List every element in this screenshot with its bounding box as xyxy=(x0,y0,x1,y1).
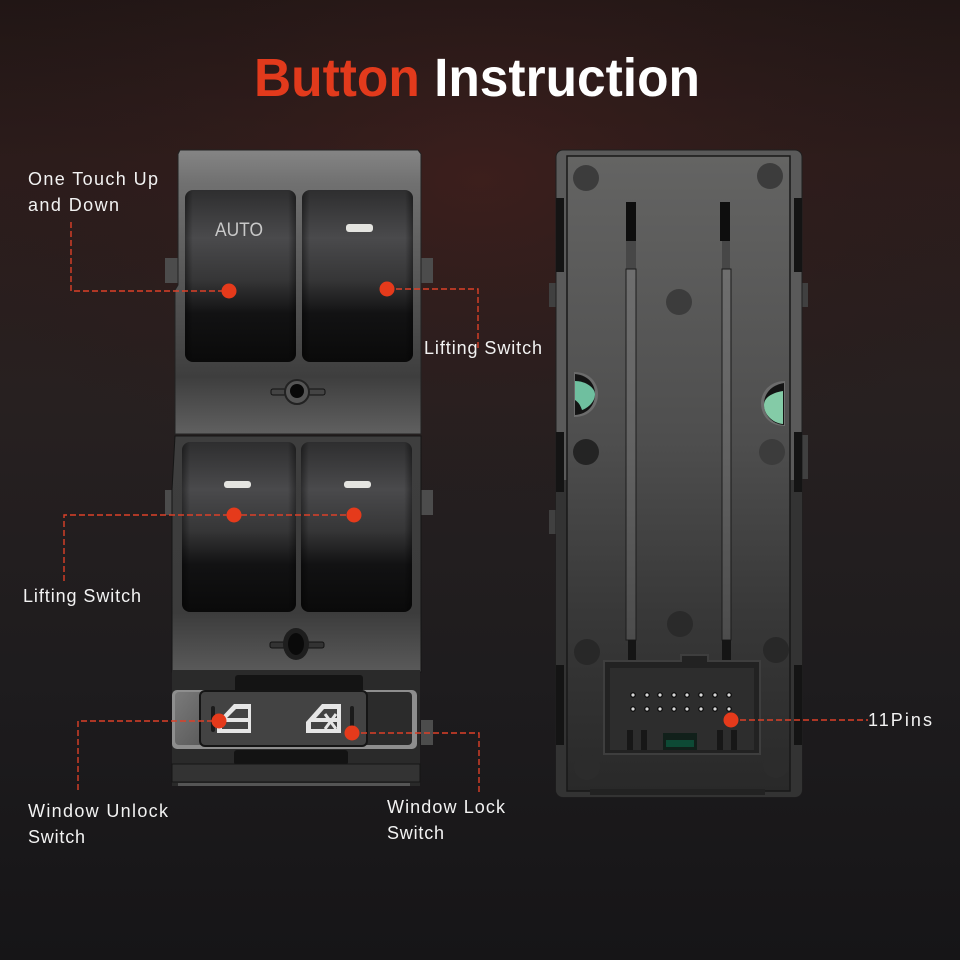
center screw post lower xyxy=(270,628,324,660)
label: window lock switch xyxy=(387,797,506,843)
button: lower right xyxy=(301,442,412,612)
lower plate xyxy=(172,436,421,672)
button: lower left xyxy=(182,442,296,612)
connector pins xyxy=(631,693,731,711)
label: window unlock switch xyxy=(28,801,169,847)
side clips xyxy=(165,258,433,745)
connector latch xyxy=(663,733,697,750)
front view: window switch xyxy=(165,150,433,786)
callout dots xyxy=(212,282,738,740)
rail: left xyxy=(626,202,636,665)
side clips xyxy=(549,283,808,534)
label: window unlock switch: Switch xyxy=(28,827,85,847)
button: AUTO: AUTO xyxy=(215,220,263,241)
icon: window unlock xyxy=(211,704,251,733)
button: top right xyxy=(302,190,413,362)
center screw post upper xyxy=(271,380,325,404)
label: lifting switch lower: Lifting Switch xyxy=(23,586,141,606)
button: AUTO xyxy=(185,190,296,362)
upper plate xyxy=(175,150,421,434)
label: one touch up and down: One Touch Up xyxy=(28,169,158,189)
outer shell xyxy=(556,150,802,797)
round ejector marks xyxy=(573,163,789,780)
icon: window lock xyxy=(306,704,354,733)
label: one touch up and down: and Down xyxy=(28,195,119,215)
green window left xyxy=(574,372,598,417)
label: lifting switch top: Lifting Switch xyxy=(424,338,542,358)
label: one touch up and down xyxy=(28,169,158,215)
rail: right xyxy=(720,202,731,665)
label: window lock switch: Switch xyxy=(387,823,444,843)
side notches xyxy=(556,198,802,745)
callout lines xyxy=(64,222,868,795)
back view: switch rear housing xyxy=(549,150,808,797)
green window right xyxy=(761,381,785,426)
title: Button Instruction xyxy=(254,48,700,108)
inner panel xyxy=(567,156,790,791)
lock switch housing xyxy=(172,670,420,786)
label: window lock switch: Window Lock xyxy=(387,797,506,817)
label: window unlock switch: Window Unlock xyxy=(28,801,169,821)
label: 11 pins: 11Pins xyxy=(868,710,932,730)
connector socket xyxy=(604,655,760,754)
